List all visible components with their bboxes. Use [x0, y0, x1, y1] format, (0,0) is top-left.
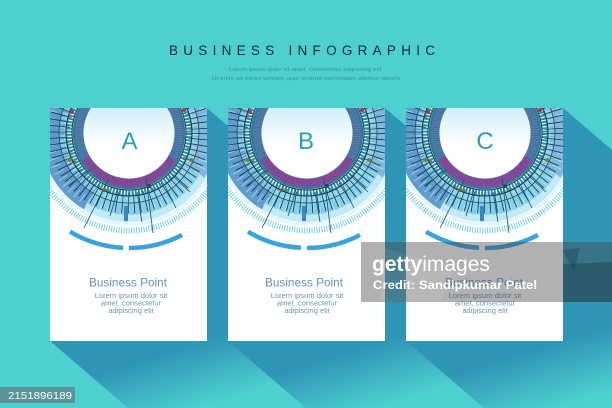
card A body text: amet, consectetur — [101, 298, 162, 308]
card A background — [50, 108, 207, 341]
card C body text: Lorem ipsum dolor sit — [449, 291, 522, 300]
watermark band — [361, 242, 612, 302]
watermark logo text: gettyimages — [372, 253, 490, 276]
card A body text: adipiscing elit — [108, 306, 155, 315]
card A radial graphic — [32, 36, 226, 248]
subtitle text: Ut enim ad minim veniam, quis nostrud exercitation ullamco laboris — [212, 76, 400, 82]
long shadows of the cards — [50, 108, 612, 408]
card C heading: Business Point — [445, 276, 524, 290]
card A body text: Lorem ipsum dolor sit — [95, 291, 168, 300]
panel: card C — [388, 36, 582, 341]
card C letter: C — [476, 128, 494, 155]
card A heading: Business Point — [89, 276, 168, 290]
image id badge — [0, 387, 75, 403]
card B body text: adipiscing elit — [284, 306, 331, 315]
panel: card B — [210, 36, 404, 341]
card B heading: Business Point — [265, 276, 344, 290]
card A body text — [95, 291, 168, 315]
watermark credit: Credit: Sandipkumar Patel — [373, 280, 537, 292]
subtitle text — [212, 67, 400, 82]
card B radial graphic — [210, 36, 404, 248]
card B body text: Lorem ipsum dolor sit — [271, 291, 344, 300]
card B letter: B — [298, 128, 314, 155]
card C body text: adipiscing elit — [462, 306, 509, 315]
subtitle text: Lorem ipsum dolor sit amet, consectetur adipiscing elit, — [229, 67, 383, 73]
card C body text: amet, consectetur — [455, 298, 516, 308]
card C background — [406, 108, 563, 341]
card C radial graphic — [388, 36, 582, 248]
card B body text: amet, consectetur — [277, 298, 338, 308]
image id badge: 2151896189 — [8, 390, 72, 402]
card A letter: A — [121, 128, 138, 155]
card B background — [228, 108, 385, 341]
title: BUSINESS INFOGRAPHIC — [169, 43, 435, 58]
card B body text — [271, 291, 344, 315]
card C body text — [449, 291, 522, 315]
panel: card A — [32, 36, 226, 341]
